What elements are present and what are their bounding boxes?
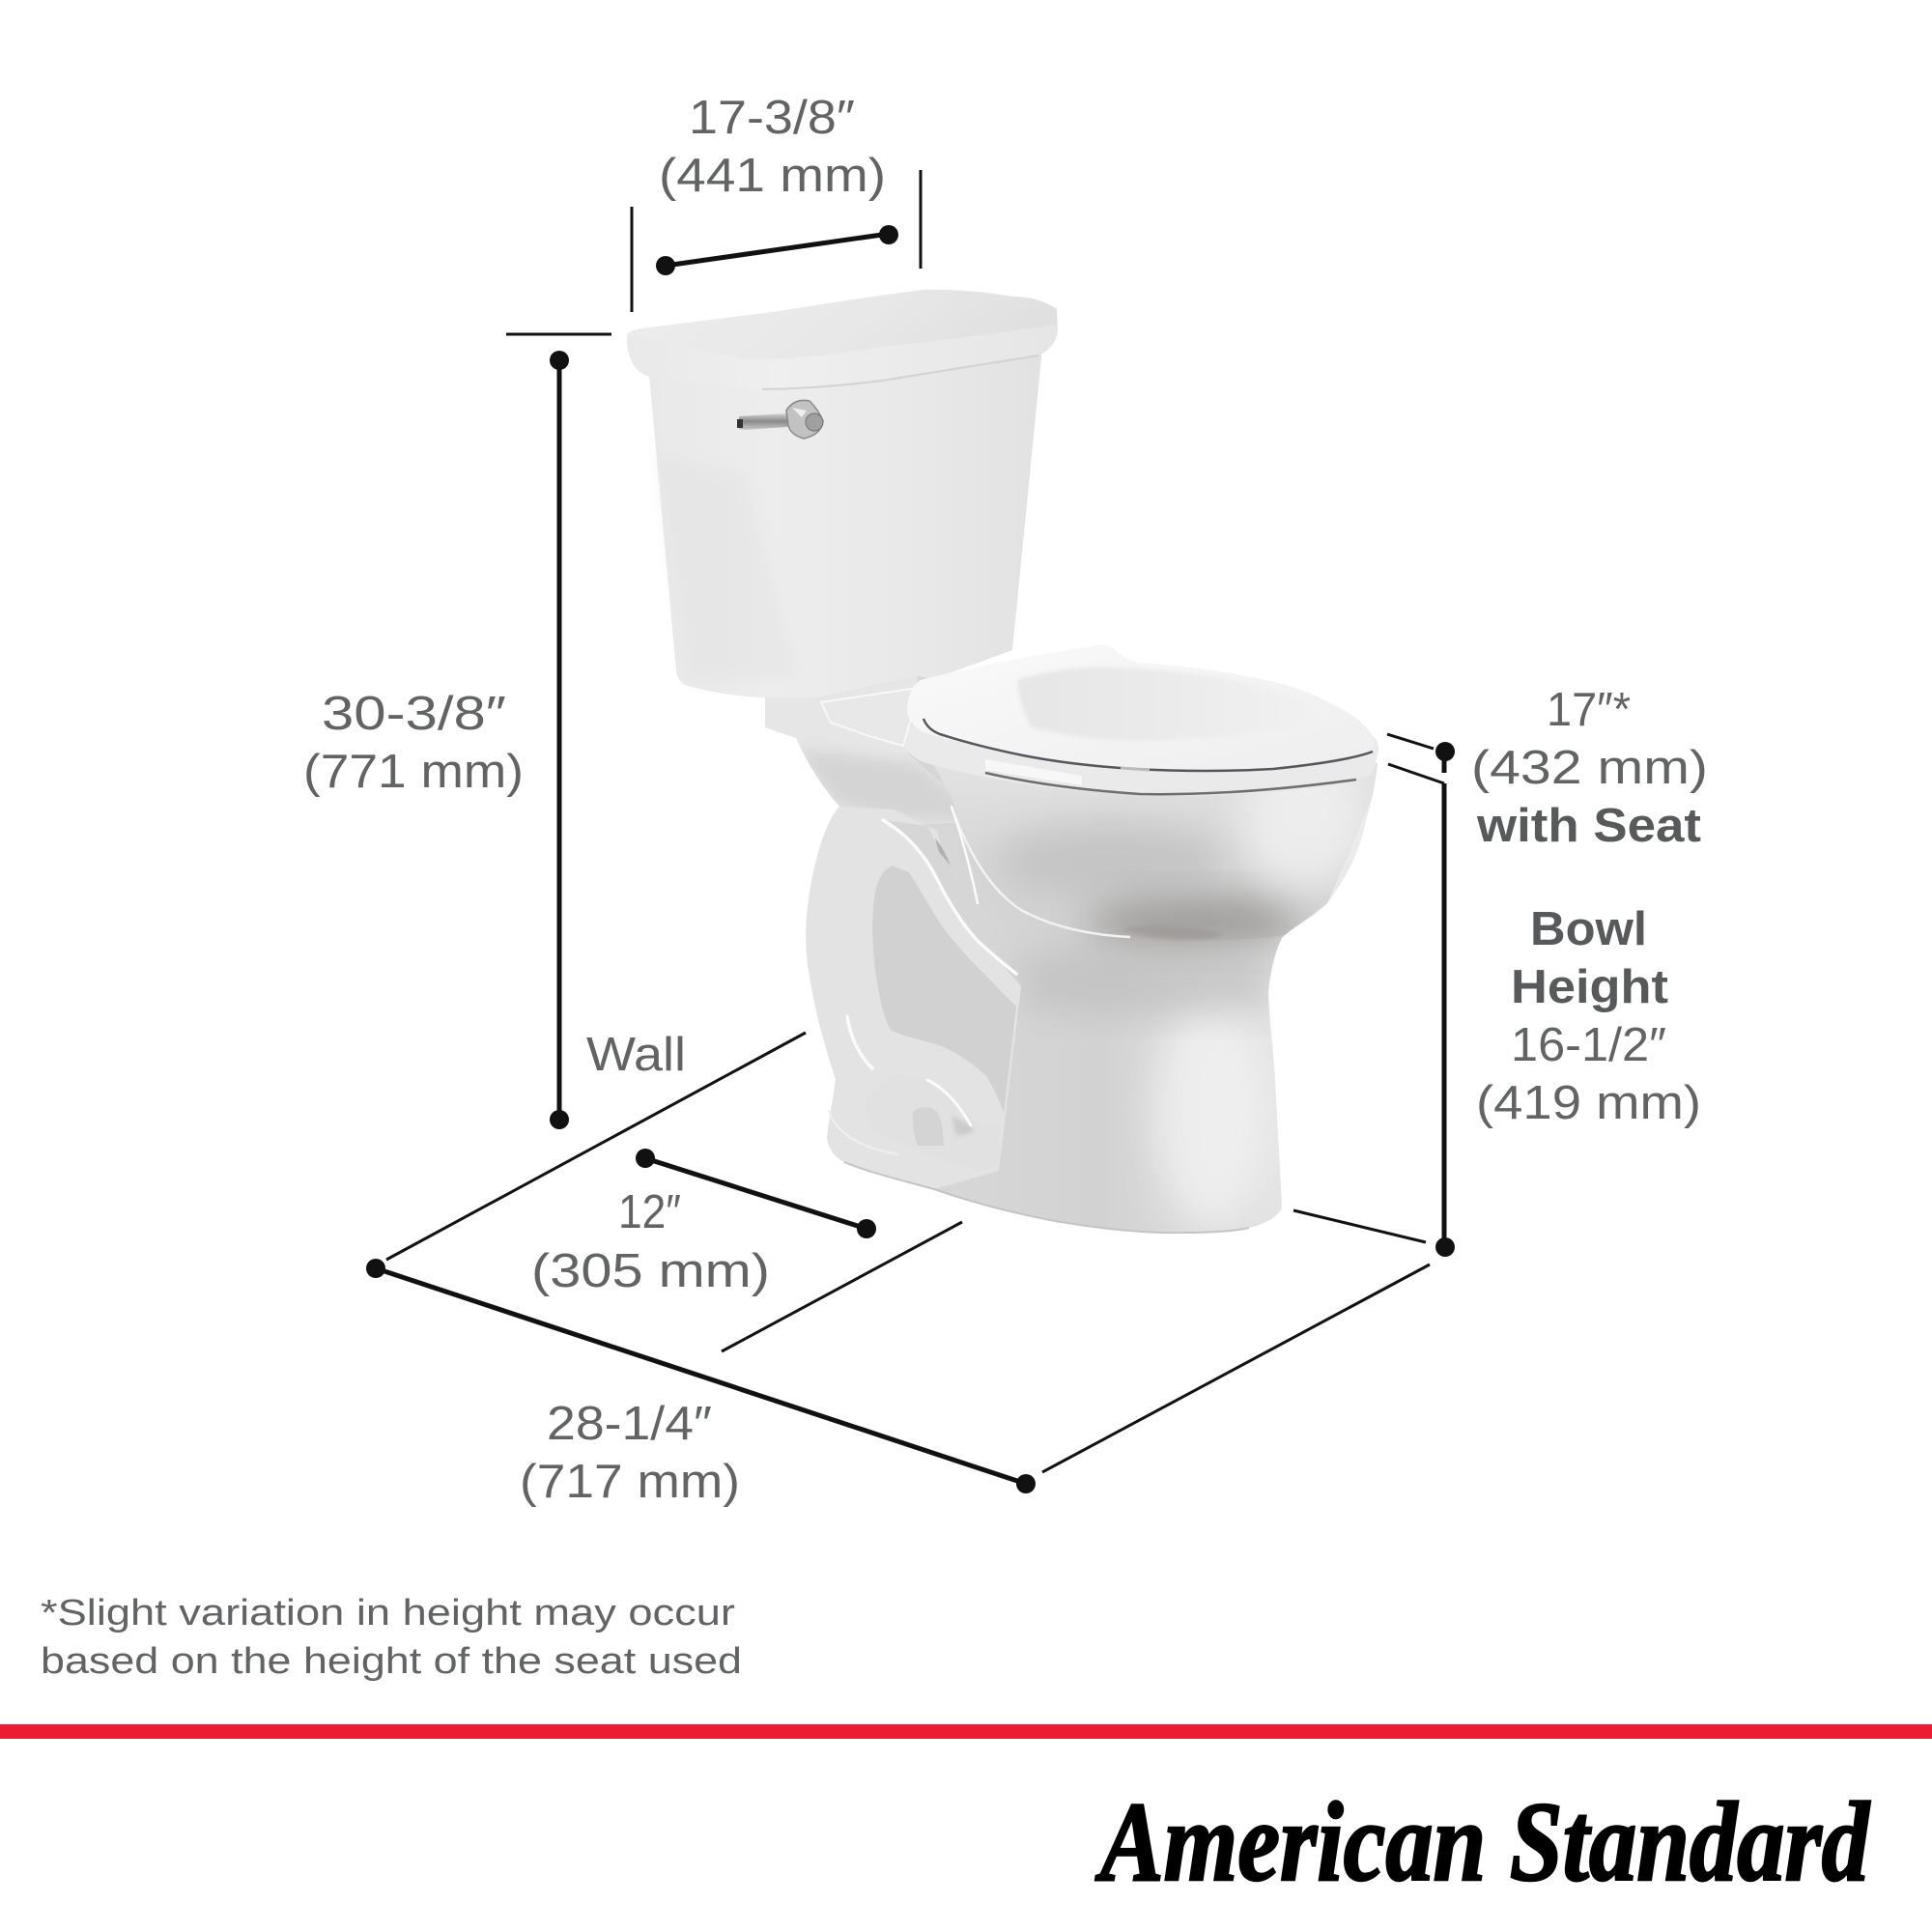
dimension: rough-in	[531, 1149, 876, 1297]
dimension: rough-in: (305 mm)	[531, 1245, 770, 1297]
dimension: rough-in: 12″	[618, 1186, 681, 1238]
footnote	[41, 1593, 742, 1682]
bowl rim	[904, 720, 1378, 795]
dimension: tank width	[632, 92, 921, 312]
dimension: overall depth	[366, 1033, 1430, 1508]
rear cavity panel	[872, 866, 1016, 1114]
dimension: tank width: (441 mm)	[659, 150, 886, 202]
cavity floor	[865, 1072, 1000, 1171]
dimension: overall height	[303, 334, 611, 1129]
footnote: based on the height of the seat used	[41, 1641, 742, 1682]
toilet tank body	[649, 348, 1042, 697]
neck shading	[765, 676, 960, 825]
bottom edge shadow	[844, 1162, 1249, 1233]
tank lid	[627, 290, 1058, 389]
dimension: overall height: (771 mm)	[303, 746, 524, 798]
flush handle	[737, 400, 823, 439]
dimension: tank width: 17-3/8″	[689, 92, 855, 144]
dimension: seat and bowl height: 17″*	[1547, 684, 1631, 736]
toilet illustration	[627, 290, 1391, 1233]
toilet seat	[907, 644, 1374, 771]
dimension: seat and bowl height: (432 mm)	[1471, 742, 1708, 794]
crease shadow	[935, 838, 951, 866]
bolt cap	[913, 1107, 944, 1146]
red divider bar	[0, 1724, 1932, 1739]
bowl and pedestal	[765, 676, 1391, 1233]
bowl surface	[934, 763, 1378, 939]
dimension: seat and bowl height: Bowl	[1530, 903, 1647, 955]
dimension: overall depth: (717 mm)	[520, 1456, 740, 1508]
dimension: seat and bowl height: (419 mm)	[1476, 1077, 1701, 1129]
connector deck	[821, 688, 918, 746]
dimension: seat and bowl height: with Seat	[1476, 800, 1701, 852]
glaze highlights	[829, 807, 1016, 1154]
trapway ring	[806, 807, 1021, 1189]
dimension: seat and bowl height: Height	[1511, 961, 1668, 1013]
dimension: seat and bowl height: 16-1/2″	[1511, 1019, 1666, 1071]
dimension: seat and bowl height	[1293, 684, 1708, 1257]
footnote: *Slight variation in height may occur	[41, 1593, 735, 1634]
cap shadow	[952, 1116, 974, 1136]
dimension: overall height: 30-3/8″	[322, 688, 506, 740]
wall label: Wall	[586, 1029, 686, 1081]
dimension: overall depth: 28-1/4″	[547, 1398, 712, 1450]
